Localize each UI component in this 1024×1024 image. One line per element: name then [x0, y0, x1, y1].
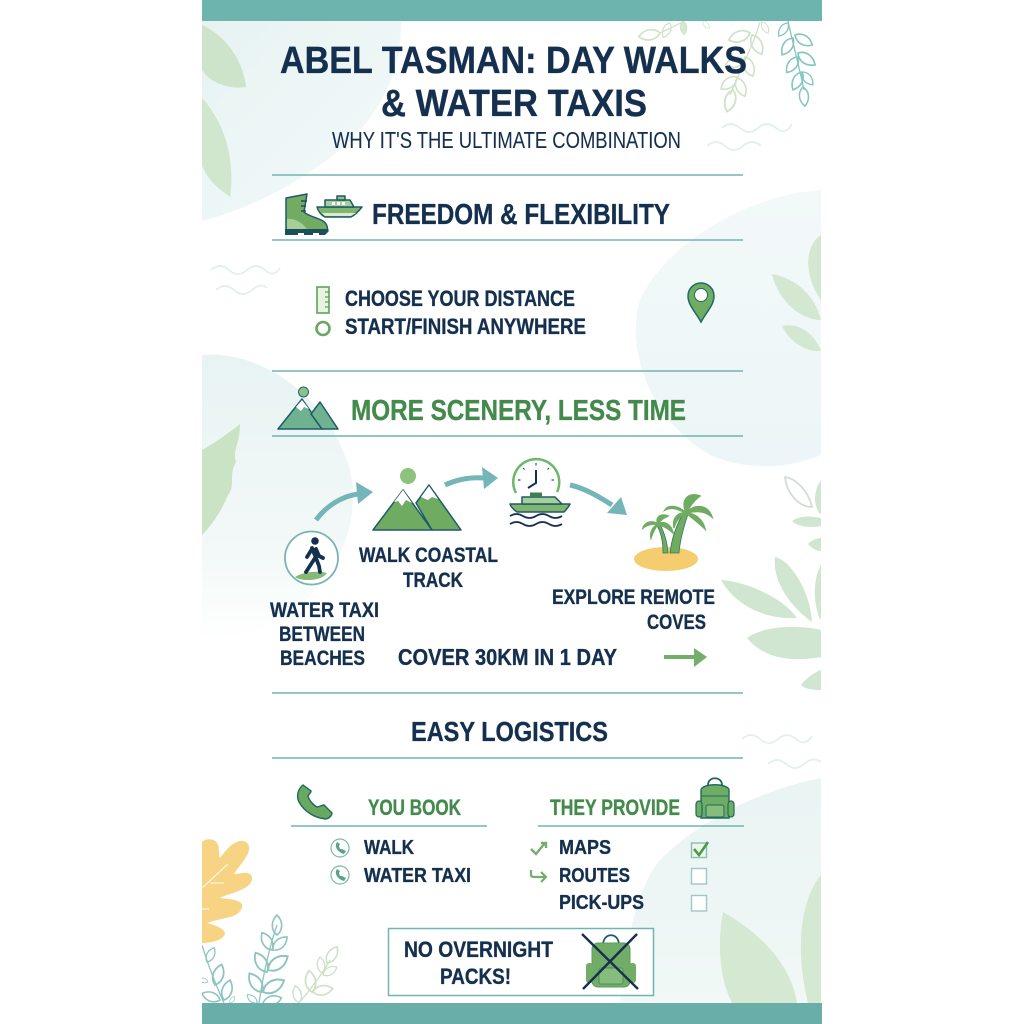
- icon: crossed out backpack: [582, 934, 638, 989]
- decorative fern: bottom left: [198, 915, 341, 1007]
- icon: phone badge water taxi: [331, 866, 349, 884]
- icon: route arrow: [531, 870, 546, 882]
- arrow: step two to three: [445, 467, 498, 489]
- label: water taxi between beaches: [270, 599, 379, 670]
- list item: choose your distance: CHOOSE YOUR DISTANCE: [345, 286, 575, 311]
- label: water taxi between beaches: WATER TAXI: [270, 599, 379, 622]
- list item: pick-ups: PICK-UPS: [559, 892, 644, 914]
- bottom band: [202, 1003, 822, 1024]
- icon: hiking boot: [285, 194, 328, 235]
- title line 1: ABEL TASMAN: DAY WALKS: [280, 40, 747, 82]
- decorative leaf: yellow: [202, 839, 252, 943]
- section: freedom and flexibility: [285, 194, 714, 339]
- arrow: green right: [664, 648, 707, 667]
- icon: clock: [513, 459, 559, 493]
- callout: cover 30km in 1 day: COVER 30KM IN 1 DAY: [398, 644, 617, 670]
- list: they provide: [531, 837, 708, 914]
- label: walk coastal track: [359, 544, 498, 592]
- list item: maps: MAPS: [559, 837, 611, 859]
- arrow: step one to two: [316, 482, 373, 520]
- arrow: step three to four: [570, 485, 627, 515]
- icon: boat: [317, 196, 362, 217]
- label: explore remote coves: EXPLORE REMOTE: [552, 586, 715, 609]
- icon: tick arrow: [531, 843, 546, 854]
- section: easy logistics: [291, 716, 744, 996]
- section: more scenery, less time: [270, 387, 715, 670]
- icon: snowy mountains: [373, 468, 461, 530]
- list item: start finish anywhere: START/FINISH ANYWHERE: [345, 314, 586, 339]
- label: explore remote coves: [552, 586, 715, 634]
- callout: no overnight packs: PACKS!: [440, 964, 511, 989]
- label: water taxi between beaches: BEACHES: [280, 647, 365, 670]
- subtitle: WHY IT'S THE ULTIMATE COMBINATION: [332, 127, 681, 153]
- icon: palm island: [634, 495, 712, 571]
- decorative fern: top right: [638, 20, 818, 113]
- column heading: you book: YOU BOOK: [368, 795, 461, 820]
- icon: mountain: [278, 387, 338, 429]
- checkbox: checked: [692, 842, 708, 858]
- icon: water taxi boat: [510, 492, 570, 526]
- heading: FREEDOM & FLEXIBILITY: [372, 199, 670, 231]
- title line 2: & WATER TAXIS: [381, 83, 647, 125]
- heading: MORE SCENERY, LESS TIME: [351, 395, 686, 427]
- list item: routes: ROUTES: [559, 865, 630, 887]
- column heading: they provide: THEY PROVIDE: [550, 795, 680, 820]
- callout: no overnight packs: NO OVERNIGHT: [404, 937, 553, 962]
- callout: no overnight packs: [388, 928, 654, 996]
- icon: backpack: [696, 778, 734, 818]
- label: walk coastal track: TRACK: [403, 569, 463, 592]
- label: explore remote coves: COVES: [647, 611, 706, 634]
- panel: background: [202, 0, 822, 1024]
- list item: water taxi: WATER TAXI: [364, 865, 471, 887]
- list item: walk: WALK: [364, 837, 414, 859]
- top band: [202, 0, 822, 21]
- label: water taxi between beaches: BETWEEN: [279, 623, 365, 646]
- label: walk coastal track: WALK COASTAL: [359, 544, 498, 567]
- icon: walker badge: [285, 532, 338, 584]
- icon: ruler: [317, 287, 329, 313]
- list: you book: [331, 837, 471, 887]
- decorative waves: [211, 124, 821, 768]
- icon: phone badge walk: [331, 839, 349, 857]
- heading: EASY LOGISTICS: [411, 716, 608, 747]
- icon: phone: [298, 785, 332, 819]
- icon: ring: [316, 322, 330, 335]
- title block: [280, 40, 747, 153]
- checkbox: empty pick-ups: [692, 896, 706, 911]
- checkbox: empty routes: [692, 868, 706, 884]
- icon: map pin: [688, 283, 714, 322]
